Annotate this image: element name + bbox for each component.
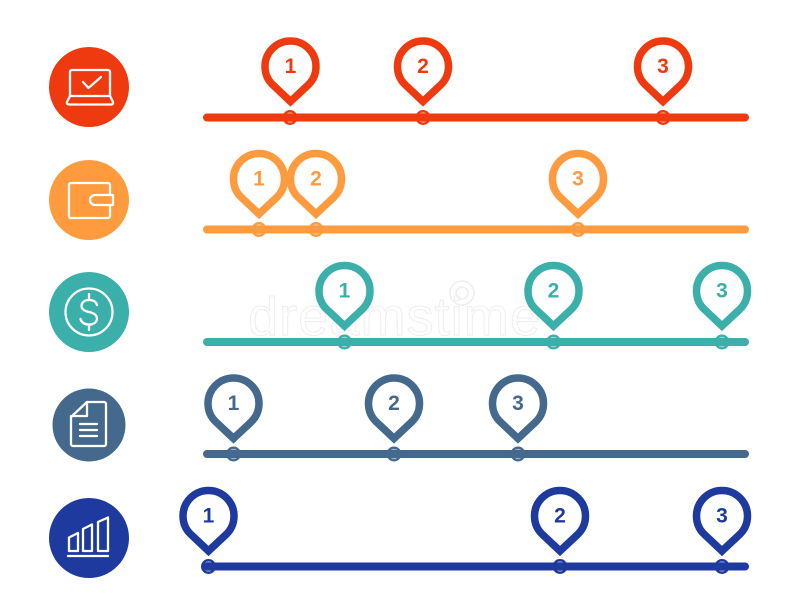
pin 3 — [638, 41, 688, 102]
row 5: bar chart timeline — [49, 490, 749, 578]
row 2: wallet timeline — [49, 153, 749, 240]
icon: dollar coin — [49, 272, 129, 352]
timeline bar — [203, 334, 749, 350]
pin 2: 2 — [310, 168, 322, 190]
pin 2 — [290, 153, 342, 214]
icon: bar chart — [49, 498, 129, 578]
pin 1 — [234, 153, 284, 214]
icon: laptop — [49, 47, 129, 127]
watermark: dreamstime — [248, 287, 540, 347]
pin 2 — [368, 378, 420, 438]
pin 2 — [534, 490, 586, 551]
pin 3: 3 — [512, 392, 524, 415]
pin 3 — [552, 153, 604, 214]
timeline bar — [203, 222, 749, 237]
pin 3: 3 — [716, 504, 728, 528]
row 3: dollar timeline — [49, 265, 749, 352]
pin 1 — [183, 490, 234, 551]
pin 2 — [528, 265, 579, 326]
pin 1: 1 — [228, 392, 240, 415]
timeline bar — [203, 110, 749, 125]
pin 2 — [398, 41, 448, 102]
icon: wallet — [49, 160, 129, 240]
row 1: laptop timeline — [49, 41, 749, 127]
pin 2: 2 — [417, 55, 429, 78]
pin 3: 3 — [572, 168, 584, 190]
pin 3: 3 — [716, 280, 728, 302]
pin 1 — [319, 265, 370, 326]
pin 2: 2 — [388, 392, 400, 415]
pin 1: 1 — [285, 55, 297, 78]
pin 1 — [208, 378, 259, 438]
pin 2: 2 — [548, 280, 559, 302]
timeline bar — [203, 446, 749, 462]
row 4: document timeline — [52, 378, 749, 462]
pin 1: 1 — [339, 280, 351, 302]
icon: document — [52, 388, 126, 462]
pin 1 — [265, 41, 316, 102]
pin 2: 2 — [554, 504, 566, 528]
pin 3 — [696, 265, 748, 326]
pin 1: 1 — [203, 504, 215, 528]
pin 3: 3 — [657, 55, 669, 78]
pin 3 — [492, 378, 544, 438]
pin 3 — [696, 490, 748, 551]
pin 1: 1 — [253, 168, 265, 190]
timeline bar — [201, 559, 749, 574]
